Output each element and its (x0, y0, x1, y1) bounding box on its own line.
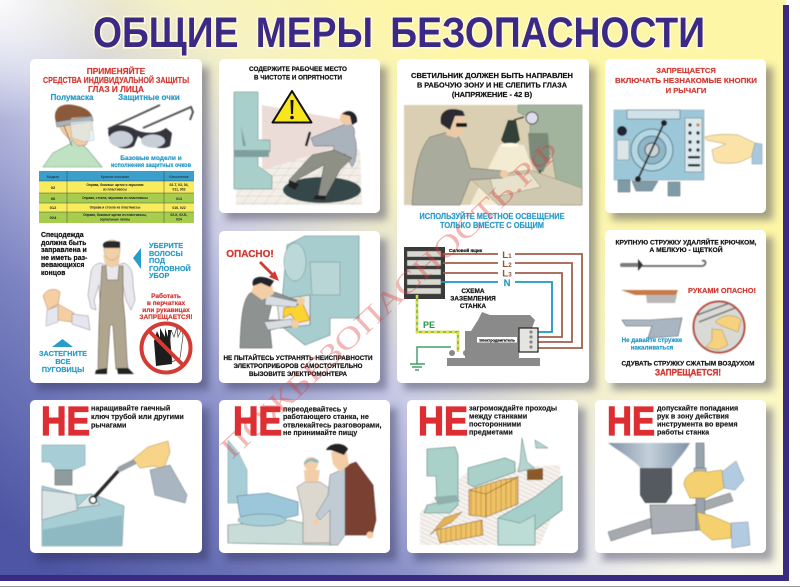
heading: lamp direction: (НАПРЯЖЕНИЕ - 42 В) (452, 90, 533, 99)
text: fasten all buttons (39, 349, 87, 374)
wires: phases and neutral (441, 254, 582, 348)
icon: warning triangle (272, 91, 312, 122)
heading: local lighting: ИСПОЛЬЗУЙТЕ МЕСТНОЕ ОСВЕЩЕНИЕ (420, 212, 564, 221)
panel: keep hands out of tool zone (595, 398, 766, 553)
text: wrench rule: наращивайте гаечный (91, 404, 170, 412)
heading: apply protective equipment (43, 65, 189, 94)
text: tuck away hair: УБОР (149, 271, 169, 280)
icon: motor on base: Электродвигатель (479, 338, 515, 342)
panel: do not extend wrench (30, 398, 202, 553)
panel: do not repair electrics (219, 231, 380, 383)
table: goggle models: 02-Т, 03, 04, (170, 183, 188, 187)
text: attention rule: отвлекайтесь разговорами, (283, 420, 382, 430)
icon: machine control panel (614, 110, 704, 196)
text: workwear must be fastened: вевающихся (41, 262, 84, 269)
caption: basic models: исполнения защитных очков (111, 162, 191, 169)
table: goggle models: 06 (51, 196, 56, 201)
heading: forbidden: ВКЛЮЧАТЬ НЕЗНАКОМЫЕ КНОПКИ (615, 76, 757, 85)
text: tuck away hair: ГОЛОВНОЙ (149, 264, 191, 273)
heading: apply protective equipment: ПРИМЕНЯЙТЕ (87, 65, 146, 76)
heading: apply protective equipment: СРЕДСТВА ИНДИВИДУАЛЬНОЙ ЗАЩИТЫ (43, 74, 189, 85)
arrow: to button (52, 339, 73, 347)
warning: compressed air forbidden: ЗАПРЕЩАЕТСЯ! (655, 368, 721, 378)
heading: forbidden (615, 66, 757, 95)
text: fasten all buttons: ПУГОВИЦЫ (42, 365, 84, 374)
icon: ground symbol (410, 347, 451, 370)
icon: chip scoop (622, 318, 682, 338)
labels: wire names: L1 (502, 250, 512, 261)
heading: lamp direction (411, 71, 573, 99)
panel: personal protection (30, 59, 202, 383)
table: goggle models: 014 (176, 197, 182, 201)
warning: compressed air forbidden (622, 360, 755, 378)
caption: do not heat chips (622, 337, 683, 352)
table: goggle models: 024 (176, 218, 182, 222)
text: hands rule: допускайте попадания (657, 404, 738, 412)
table: goggle models: Оправа, стекла, заушники из пластмассы (82, 196, 148, 200)
icon: power cabinet (404, 247, 445, 299)
heading: local lighting (420, 212, 564, 230)
label: power box: Силовой ящик (449, 247, 483, 253)
label: grounding scheme: СХЕМА (461, 288, 485, 295)
text: gloves forbidden: в перчатках (147, 300, 185, 307)
text: passages rule: предметами (469, 428, 513, 436)
heading: forbidden: ЗАПРЕЩАЕТСЯ (656, 66, 716, 75)
label: goggles: Защитные очки (118, 93, 180, 102)
text: workwear must be fastened: концов (41, 270, 65, 277)
table: goggle models: Исполнение (169, 175, 189, 179)
text: fasten all buttons: ВСЕ (55, 357, 71, 366)
text: gloves forbidden (139, 292, 193, 321)
wire: protective earth (417, 295, 458, 352)
table: goggle models: 02-К, 02-Б, (170, 213, 188, 217)
table: goggle models: зеркальные линзы (100, 218, 130, 222)
text: tuck away hair: УБЕРИТЕ (149, 241, 183, 250)
text: hands rule: инструмента во время (657, 420, 738, 428)
text: call electrician (224, 353, 373, 378)
heading: keep clean: В ЧИСТОТЕ И ОПРЯТНОСТИ (254, 74, 342, 82)
text: hands rule (657, 404, 738, 436)
text: workwear must be fastened: Спецодежда (41, 232, 84, 239)
table: goggle models: 011, 002 (172, 188, 186, 192)
label: hands dangerous: РУКАМИ ОПАСНО! (688, 286, 756, 295)
big word NE: НЕ (607, 398, 655, 444)
icon: brush (621, 290, 678, 303)
text: attention rule: переодевайтесь у (283, 404, 347, 414)
text: passages rule: загромождайте проходы (469, 404, 557, 412)
caption: do not heat chips: накаливаться (631, 344, 674, 352)
text: wrench rule: ключ трубой или другими (91, 412, 184, 421)
text: hands rule: рук в зону действия (657, 412, 729, 420)
arrow: danger pointer (260, 262, 274, 276)
text: attention rule: не принимайте пищу (283, 428, 357, 437)
label: grounding scheme: ЗАЗЕМЛЕНИЯ (450, 296, 496, 302)
big word NE: НЕ (41, 398, 90, 444)
table: goggle models: Краткое описание (101, 175, 129, 179)
table: goggle models: 02 (51, 185, 56, 190)
text: call electrician: ЭЛЕКТРОПРИБОРОВ САМОСТОЯТЕЛЬНО (234, 363, 362, 370)
panel: keep workplace clean (219, 59, 380, 213)
caption: do not heat chips: Не давайте стружке (622, 337, 683, 344)
labels: wire names: N (504, 278, 511, 289)
labels: wire names: L3 (502, 268, 512, 280)
labels: wire names: L2 (502, 259, 512, 270)
watermark: ПОЖБЕЗОПАСНОСТЬ.РФ (214, 134, 566, 465)
text: call electrician: НЕ ПЫТАЙТЕСЬ УСТРАНЯТЬ НЕИСПРАВНОСТИ (224, 353, 373, 362)
heading: lamp direction: В РАБОЧУЮ ЗОНУ И НЕ СЛЕПИТЬ ГЛАЗА (417, 80, 568, 90)
icon: worker in overalls (88, 240, 135, 374)
icon: arrow head (269, 271, 279, 281)
icon: goggles (108, 105, 193, 148)
panel: unknown buttons forbidden (605, 59, 766, 213)
heading: apply protective equipment: ГЛАЗ И ЛИЦА (88, 84, 144, 94)
text: gloves forbidden: ЗАПРЕЩАЕТСЯ! (139, 314, 193, 321)
panel: do not change clothes near machine (219, 398, 390, 553)
scene: cluttered workshop (420, 438, 562, 545)
text: attention rule: работающего станка, не (283, 412, 369, 421)
table: goggle models: 024 (50, 215, 57, 220)
scene: wrench on vise (42, 441, 187, 546)
label: grounding scheme (450, 288, 496, 310)
text: workwear must be fastened: заправлена и (41, 247, 87, 254)
table: goggle models: 016, 022 (172, 206, 186, 210)
scene: machine and two workers (228, 440, 376, 545)
text: call electrician: ВЫЗОВИТЕ ЭЛЕКТРОМОНТЕРА (249, 371, 347, 378)
heading: forbidden: И РЫЧАГИ (666, 86, 706, 95)
big word NE: НЕ (233, 398, 282, 444)
text: gloves forbidden: или рукавицах (142, 307, 190, 314)
label: danger: ОПАСНО! (226, 249, 274, 260)
table: goggle models: из пластмассы (103, 188, 127, 192)
heading: local lighting: ТОЛЬКО ВМЕСТЕ С ОБЩИМ (440, 221, 544, 230)
table: goggle models: Оправа, боковые щитки из пластмассы, (83, 213, 147, 217)
warning: compressed air forbidden: СДУВАТЬ СТРУЖКУ СЖАТЫМ ВОЗДУХОМ (622, 360, 755, 368)
text: tuck away hair: ПОД (149, 256, 166, 265)
heading: lamp direction: СВЕТИЛЬНИК ДОЛЖЕН БЫТЬ НАПРАВЛЕН (411, 71, 573, 80)
icon: hands in chips (694, 302, 744, 352)
text: workwear must be fastened: должна быть (41, 239, 86, 247)
panel: lighting and grounding (397, 59, 589, 383)
text: wrench rule: рычагами (91, 420, 126, 430)
label: PE: PE (423, 320, 435, 330)
icon: pointing hand (705, 134, 762, 164)
text: workwear must be fastened: не иметь раз- (41, 255, 88, 262)
heading: chip removal (616, 238, 757, 254)
icon: motor on base (447, 312, 540, 366)
big word NE: НЕ (418, 398, 468, 444)
text: workwear must be fastened (41, 232, 88, 277)
table: goggle models: Модель (47, 175, 59, 179)
text: attention rule (283, 404, 382, 437)
icon: no gloves sign (142, 324, 190, 372)
diagram: grounding scheme (404, 247, 582, 370)
caption: basic models (111, 155, 191, 169)
text: passages rule: между станками (469, 412, 527, 420)
text: tuck away hair: ВОЛОСЫ (149, 249, 183, 258)
heading: keep clean (249, 66, 347, 82)
icon: hand buttoning cuff (43, 289, 90, 330)
scene: worker with local lamp (404, 105, 582, 205)
table: goggle models: Оправа, боковые щитки и заушники (86, 183, 144, 187)
arrow: to hair (133, 248, 141, 269)
title: ОБЩИЕ МЕРЫ БЕЗОПАСНОСТИ (93, 9, 705, 57)
icon: hook (622, 259, 706, 271)
table: goggle models: 012 (50, 205, 57, 210)
heading: keep clean: СОДЕРЖИТЕ РАБОЧЕЕ МЕСТО (249, 66, 347, 73)
heading: chip removal: А МЕЛКУЮ - ЩЕТКОЙ (649, 245, 723, 254)
text: wrench rule (91, 404, 184, 430)
heading: chip removal: КРУПНУЮ СТРУЖКУ УДАЛЯЙТЕ КРЮЧКОМ, (616, 238, 757, 246)
scene: cutter and caliper (608, 443, 750, 548)
text: passages rule (469, 404, 557, 436)
scene: worker slipping (234, 92, 362, 205)
label: half mask: Полумаска (51, 93, 94, 102)
caption: basic models: Базовые модели и (120, 155, 182, 162)
text: tuck away hair (149, 241, 191, 280)
panel shadows (37, 67, 773, 561)
labels: wire names (502, 250, 512, 289)
table: goggle models: Оправа и стекла из пластмассы (90, 206, 141, 210)
text: gloves forbidden: Работать (151, 292, 181, 300)
text: hands rule: работы станка (657, 428, 710, 436)
scene: worker at electrical box (240, 236, 359, 348)
text: fasten all buttons: ЗАСТЕГНИТЕ (39, 349, 87, 358)
panel: chip removal (605, 230, 766, 383)
table: goggle models (39, 171, 194, 223)
label: grounding scheme: СТАНКА (460, 303, 486, 310)
panel: do not obstruct passages (407, 398, 578, 553)
text: passages rule: посторонними (469, 420, 521, 428)
icon: head with half mask (43, 105, 102, 167)
